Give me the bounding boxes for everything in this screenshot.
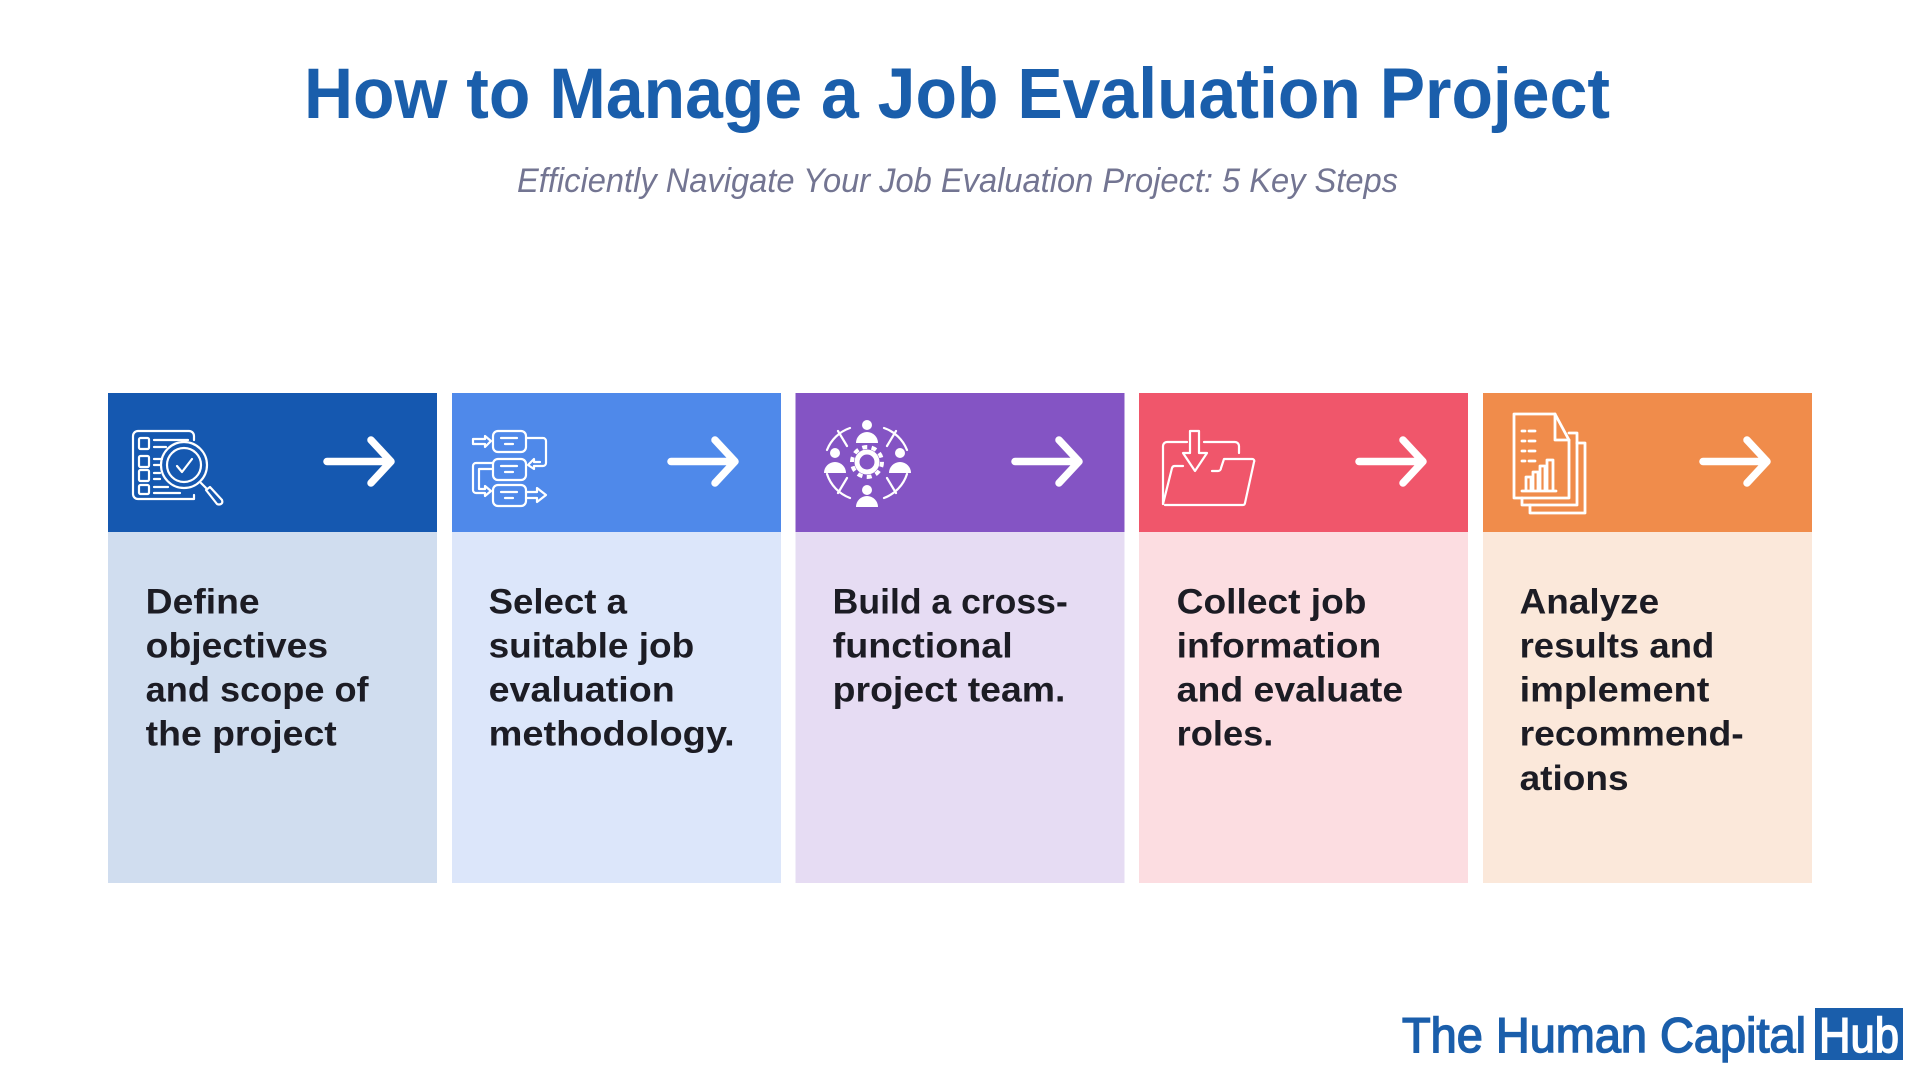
arrow [1359, 440, 1423, 483]
icon: stacked report with bars [1514, 414, 1585, 513]
step 5 text: Analyze [1520, 582, 1659, 622]
panel: step 1 define objectives [108, 393, 437, 883]
step 2 text: suitable job [489, 626, 694, 666]
step 5 text: recommend- [1520, 715, 1744, 754]
step 4 text: and evaluate [1177, 671, 1403, 710]
arrow [1015, 440, 1079, 483]
title: How to Manage a Job Evaluation Project [304, 55, 1610, 134]
step 4 header band [1139, 393, 1468, 532]
step 3 text: project team. [833, 671, 1065, 710]
step 1 text: the project [146, 715, 337, 754]
step 5 header band [1483, 393, 1812, 532]
step 2 body background [452, 531, 781, 883]
step 1 text: and scope of [146, 671, 369, 710]
arrow [1703, 440, 1767, 483]
step 2 text: methodology. [489, 715, 735, 754]
step 4 text: Collect job [1177, 582, 1366, 622]
step 5 text: ations [1520, 759, 1629, 798]
logo: The Human Capital Hub [1402, 1008, 1903, 1063]
panel: step 3 build team [796, 393, 1124, 883]
step 3 text: functional [833, 626, 1013, 666]
icon: people around gear [824, 420, 911, 507]
panel: step 4 collect information [1139, 393, 1468, 883]
step 2 text: Select a [489, 582, 628, 622]
step 2 text: evaluation [489, 671, 675, 710]
step 3 text: Build a cross- [833, 582, 1068, 622]
arrow [327, 440, 391, 483]
arrow [671, 440, 735, 483]
step 1 header band [108, 393, 437, 532]
step 2 text [489, 582, 735, 754]
step 5 body background [1483, 531, 1812, 883]
step 1 text: objectives [146, 626, 328, 666]
logo wordmark: The Human Capital [1402, 1009, 1806, 1063]
step 4 text [1177, 582, 1403, 754]
step 1 text: Define [146, 582, 260, 622]
step 3 header band [796, 393, 1124, 532]
panel: step 2 select methodology [452, 393, 781, 883]
step 5 text: results and [1520, 626, 1714, 666]
subtitle: Efficiently Navigate Your Job Evaluation Project: 5 Key Steps [517, 162, 1398, 200]
step 4 body background [1139, 531, 1468, 883]
step 2 header band [452, 393, 781, 532]
step 1 text [146, 582, 369, 754]
step 5 text [1520, 582, 1744, 798]
step 3 text [833, 582, 1068, 710]
logo hub box [1815, 1008, 1903, 1060]
step 3 body background [796, 531, 1124, 883]
step 5 text: implement [1520, 671, 1710, 710]
panel: step 5 analyze results [1483, 393, 1812, 883]
icon: process flow [473, 431, 546, 506]
step 1 body background [108, 531, 437, 883]
step 4 text: information [1177, 626, 1381, 666]
icon: folder with down arrow [1163, 431, 1254, 505]
step 4 text: roles. [1177, 715, 1273, 754]
logo hub text: Hub [1819, 1009, 1899, 1063]
icon: checklist with magnifier [133, 431, 222, 504]
